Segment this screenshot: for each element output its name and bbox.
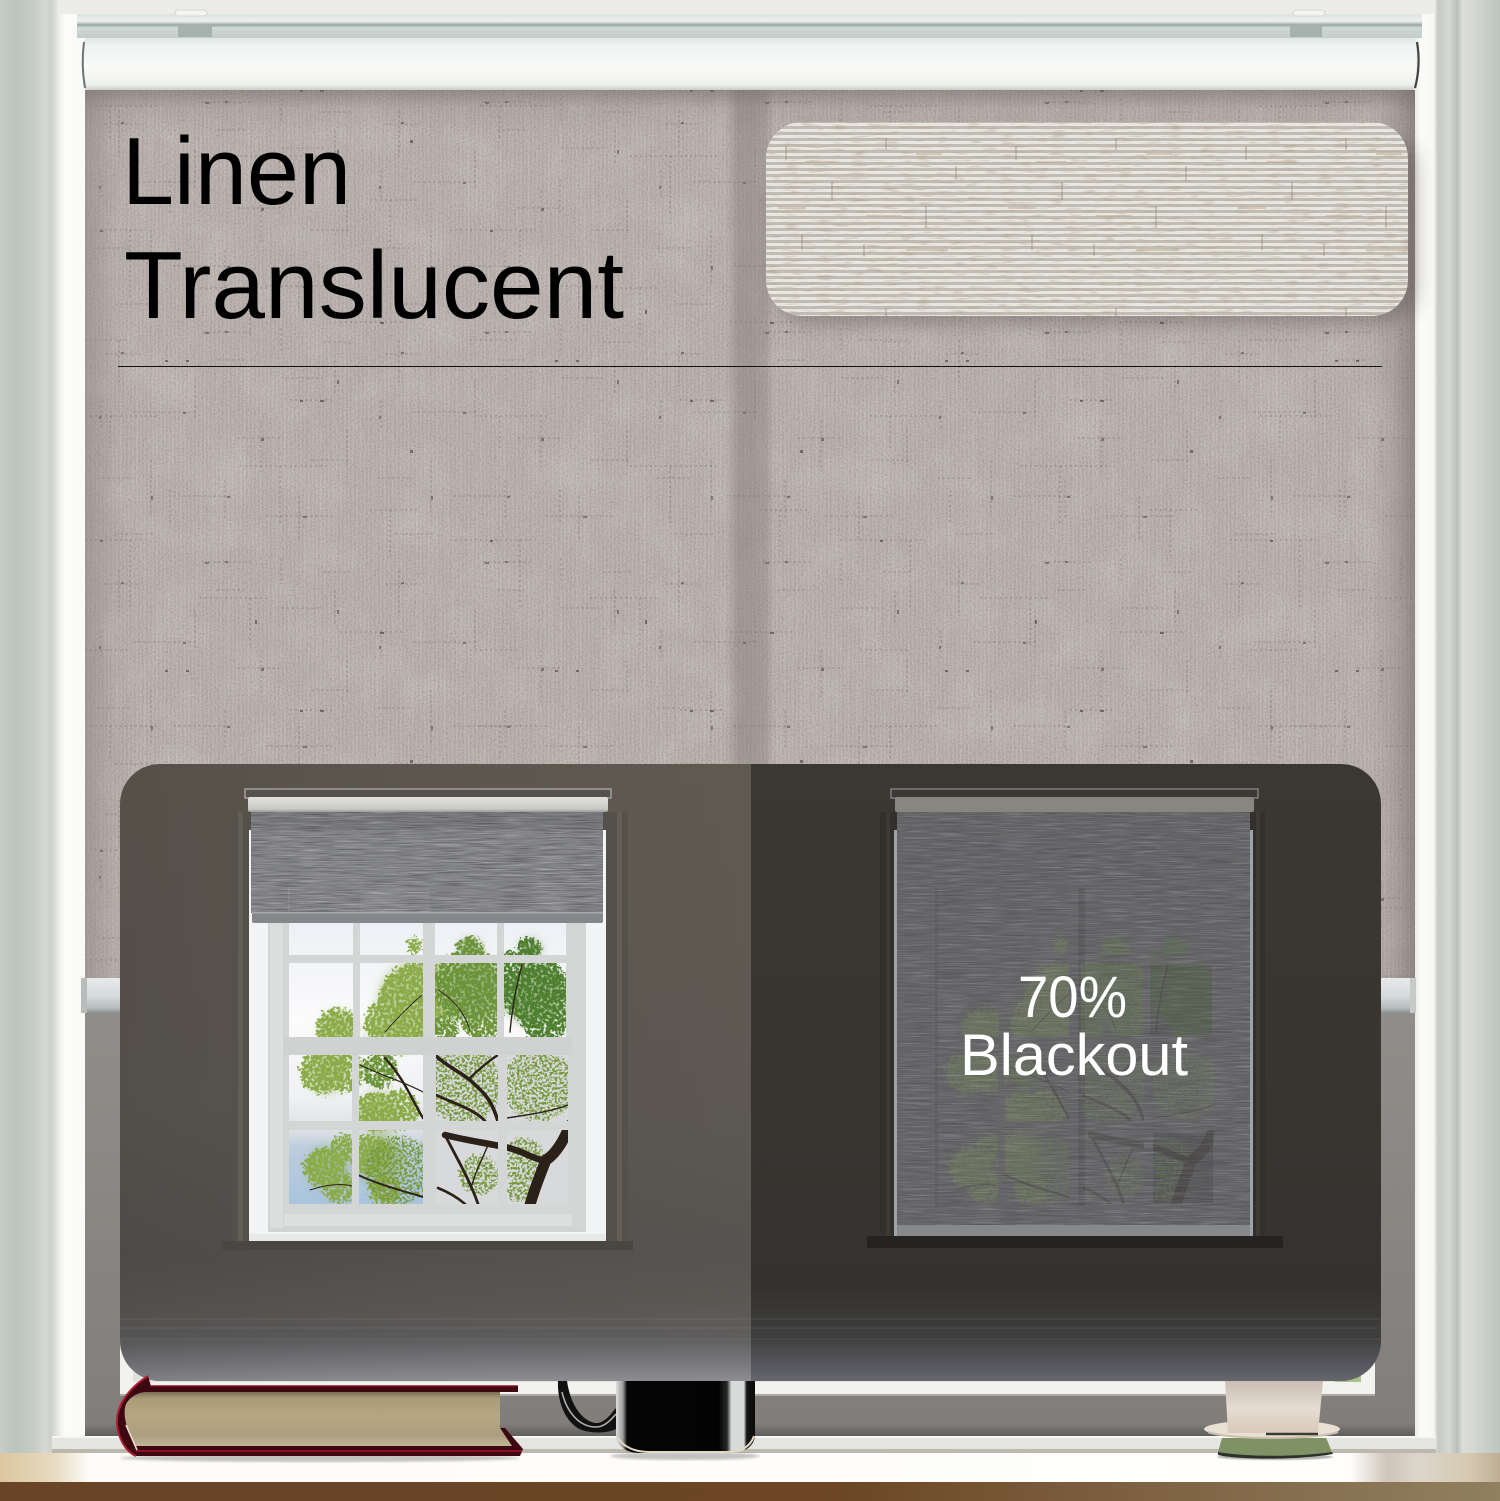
title: Linen bbox=[122, 118, 351, 225]
fabric swatch card bbox=[766, 122, 1417, 324]
label: 70% Blackout: Blackout bbox=[960, 1023, 1188, 1088]
window with open view and tree bbox=[249, 830, 606, 1241]
icon: plant pot with saucer bbox=[1204, 1381, 1340, 1460]
headrail, right window bbox=[891, 789, 1258, 812]
panel: shade raised, left half bbox=[120, 764, 751, 1381]
title bbox=[122, 118, 624, 339]
headrail, left window bbox=[245, 789, 611, 812]
linen fabric shade bbox=[85, 90, 1415, 980]
shade bottom bar ends bbox=[81, 978, 1416, 1013]
headrail and roller cassette bbox=[77, 10, 1422, 90]
window casing and sill, right bbox=[867, 812, 1283, 1248]
comparison panel bbox=[120, 764, 1381, 1381]
window casing and sill, left bbox=[222, 812, 633, 1250]
label: 70% Blackout: 70% bbox=[1018, 965, 1127, 1030]
lowered shade fabric with faint tree bbox=[897, 812, 1250, 1236]
label: 70% Blackout bbox=[964, 976, 1188, 1076]
panel: shade lowered, right half bbox=[751, 764, 1381, 1381]
divider line bbox=[118, 366, 1382, 367]
raised shade fabric bbox=[251, 812, 603, 923]
title: Translucent bbox=[124, 232, 624, 339]
icon: mug bbox=[558, 1381, 760, 1460]
icon: book bbox=[117, 1376, 523, 1462]
window sill bbox=[0, 1453, 1500, 1501]
